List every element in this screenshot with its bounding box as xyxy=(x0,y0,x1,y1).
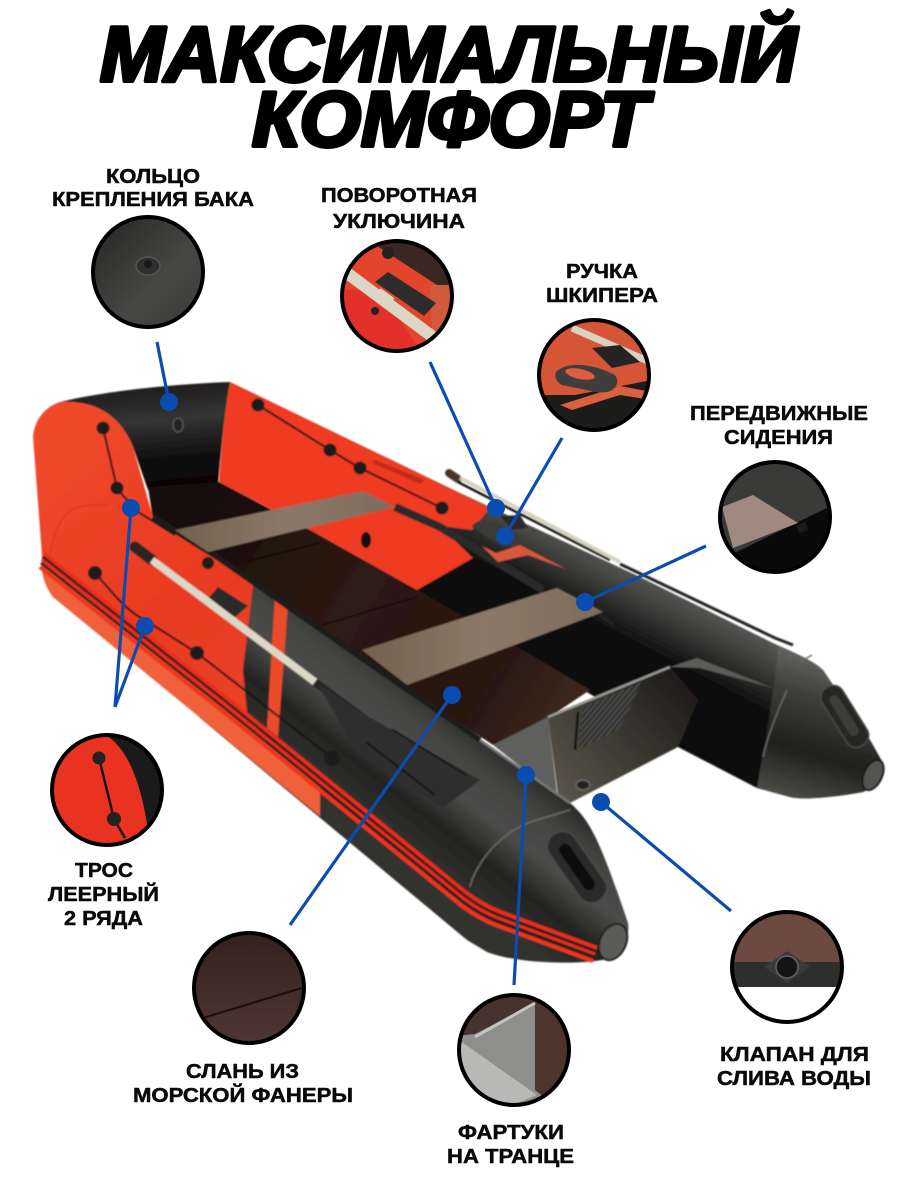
right gusset xyxy=(670,658,773,688)
seat rear xyxy=(175,491,395,552)
tank ring xyxy=(173,418,183,432)
red band xyxy=(267,595,288,737)
skipper handle and oarlock right xyxy=(472,520,520,547)
callout: movable seats xyxy=(690,403,868,575)
oar shaft over lock xyxy=(198,594,228,617)
callout: transom aprons: ФАРТУКИ xyxy=(458,1122,564,1144)
stern seam xyxy=(50,505,110,555)
stripes xyxy=(40,554,597,961)
stern black panel xyxy=(60,382,230,490)
rope side xyxy=(95,573,332,758)
blade ridges xyxy=(366,729,466,795)
second oar xyxy=(449,473,793,645)
callout: rotating oarlock: ПОВОРОТНАЯ xyxy=(321,185,477,207)
left handle xyxy=(542,826,612,908)
rope right xyxy=(258,405,442,508)
callout: skipper handle: ШКИПЕРА xyxy=(546,285,658,307)
title: КОМФОРТ xyxy=(252,75,654,163)
transom top lip xyxy=(548,667,670,717)
callout: marine plywood floor: МОРСКОЙ ФАНЕРЫ xyxy=(133,1083,353,1107)
floor xyxy=(148,482,590,745)
callout: tank ring: КОЛЬЦО xyxy=(106,166,200,188)
title xyxy=(100,10,799,163)
gunwale light edge near bow xyxy=(480,740,570,803)
seat front xyxy=(362,588,603,685)
callout: tank ring: КРЕПЛЕНИЯ БАКА xyxy=(52,189,254,211)
right oarlock xyxy=(500,515,528,530)
callout: movable seats: ПЕРЕДВИЖНЫЕ xyxy=(690,403,868,425)
callout: skipper handle xyxy=(536,261,658,433)
oar blade xyxy=(317,683,480,808)
callout: marine plywood floor xyxy=(133,930,353,1107)
callout: rotating oarlock xyxy=(321,185,477,354)
callout: safety rope xyxy=(48,732,165,930)
callout: rotating oarlock: УКЛЮЧИНА xyxy=(333,211,465,233)
callout: safety rope: 2 РЯДА xyxy=(64,908,143,930)
lower hull lighter red xyxy=(43,562,320,816)
seat bracket xyxy=(600,615,614,625)
drain hole on red side xyxy=(361,532,371,548)
floor seams xyxy=(233,543,417,625)
orange streak on right tube xyxy=(482,545,566,569)
right tube red section xyxy=(219,382,490,590)
callout: tank ring xyxy=(52,166,254,330)
title: МАКСИМАЛЬНЫЙ xyxy=(100,10,799,98)
gunwale strip right xyxy=(395,507,543,590)
callout: transom aprons: НА ТРАНЦЕ xyxy=(447,1146,574,1168)
left nose seam xyxy=(470,810,570,887)
rope stern xyxy=(103,428,175,535)
callout: marine plywood floor: СЛАНЬ ИЗ xyxy=(186,1061,299,1083)
rope knobs xyxy=(88,398,448,766)
seam plate red xyxy=(372,460,425,484)
callout: skipper handle: РУЧКА xyxy=(566,261,638,283)
boat illustration xyxy=(33,382,888,965)
right tube xyxy=(230,382,883,798)
callout: drain valve xyxy=(717,909,871,1090)
transom slot and drain valve xyxy=(575,712,578,750)
transom xyxy=(548,667,698,803)
left oar xyxy=(135,547,400,745)
gunwale strip left xyxy=(153,517,480,740)
right nose seam xyxy=(763,655,812,757)
callout: transom aprons xyxy=(447,992,574,1168)
callout lines xyxy=(115,342,731,985)
carbon pad xyxy=(578,682,642,750)
callout: safety rope: ЛЕЕРНЫЙ xyxy=(48,882,159,906)
right end cap xyxy=(858,757,888,793)
left tube red section xyxy=(33,402,320,816)
transom gusset xyxy=(493,717,557,793)
left tube xyxy=(153,517,628,963)
callout: safety rope: ТРОС xyxy=(75,860,133,882)
callout: drain valve: КЛАПАН ДЛЯ xyxy=(720,1044,869,1066)
callout: movable seats: СИДЕНИЯ xyxy=(724,427,833,449)
left end cap xyxy=(593,919,633,965)
oarlock left xyxy=(207,587,248,617)
right tube nose xyxy=(757,646,883,798)
callout: drain valve: СЛИВА ВОДЫ xyxy=(717,1068,871,1090)
right handle xyxy=(816,681,873,752)
